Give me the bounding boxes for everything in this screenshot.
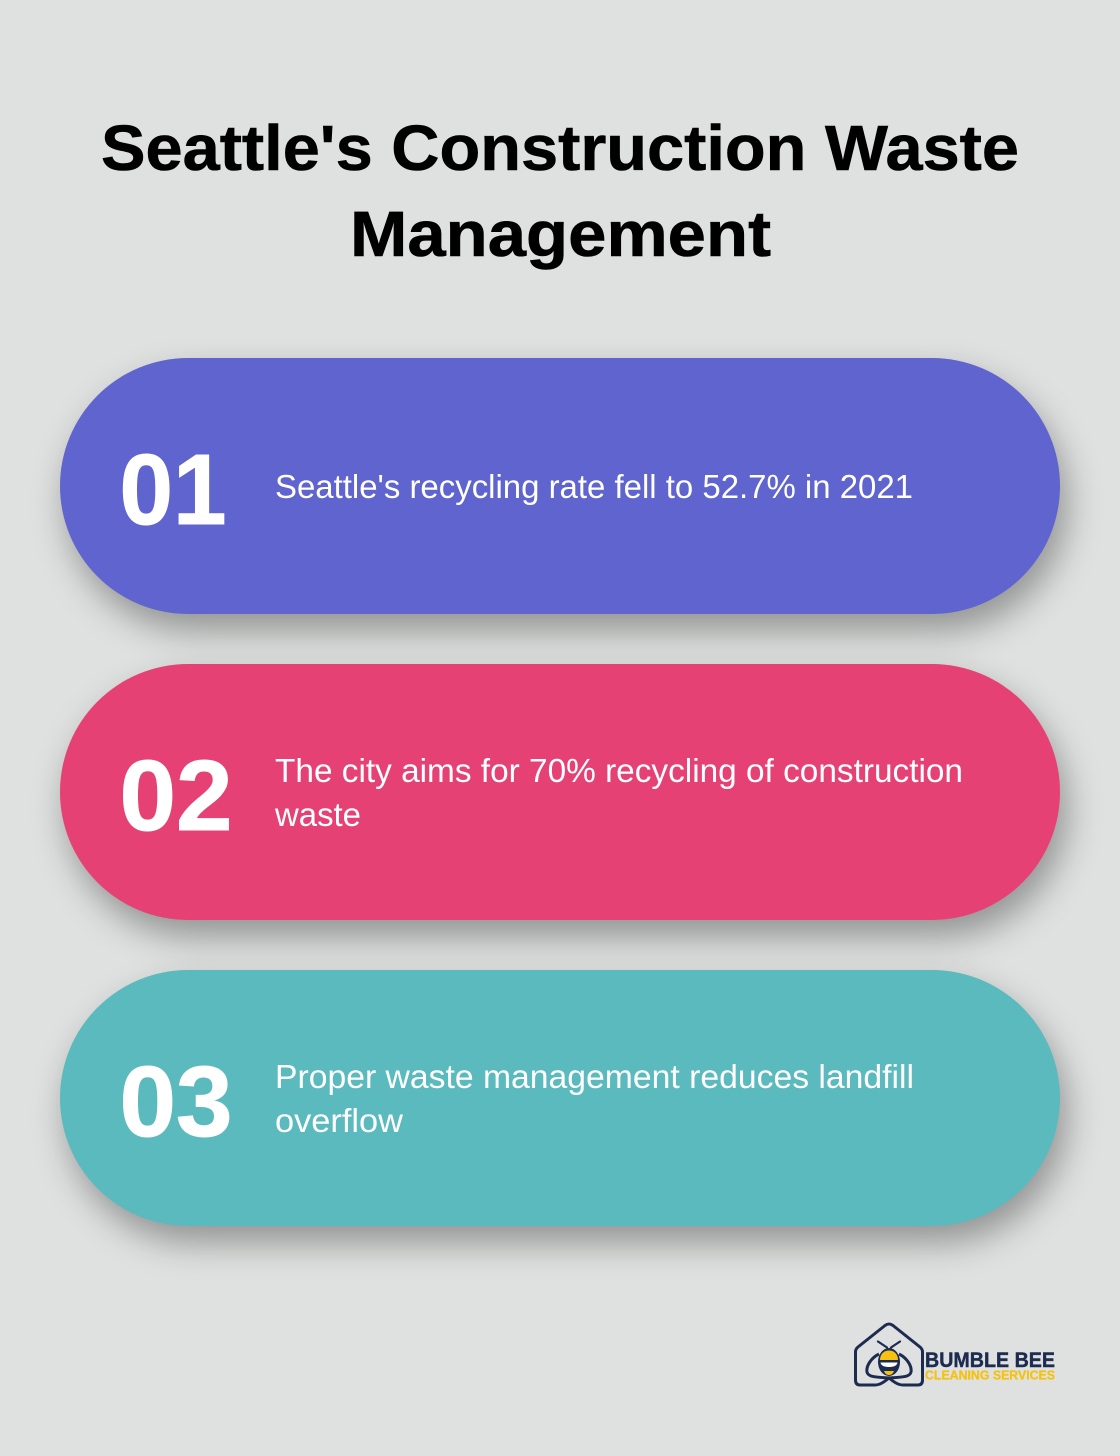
logo name: BUMBLE BEE: [925, 1349, 1055, 1372]
text 1: Seattle's recycling rate fell to 52.7% in 2021: [275, 468, 913, 505]
item 1 content: [120, 434, 913, 546]
text 2: [274, 752, 963, 833]
panel: item 2 background: [60, 664, 1060, 920]
logo: Bumble Bee Cleaning Services: [856, 1324, 1055, 1385]
item 3 content: [120, 1046, 914, 1158]
logo tagline: CLEANING SERVICES: [925, 1368, 1055, 1382]
title: [101, 112, 1019, 270]
panel: item 1 background: [60, 358, 1060, 614]
text 3: [275, 1058, 914, 1139]
title: Management: [350, 198, 771, 270]
text 3: overflow: [275, 1102, 403, 1139]
panel: item 3 background: [60, 970, 1060, 1226]
title: Seattle's Construction Waste: [101, 112, 1019, 184]
text 2: waste: [274, 796, 361, 833]
number 03: 03: [120, 1046, 232, 1158]
text 2: The city aims for 70% recycling of construction: [275, 752, 963, 789]
icon: house outline: [856, 1324, 922, 1385]
number 01: 01: [120, 434, 226, 546]
text 3: Proper waste management reduces landfill: [275, 1058, 914, 1095]
item 2 content: [120, 740, 963, 852]
number 02: 02: [120, 740, 232, 852]
icon: bee: [867, 1342, 911, 1378]
